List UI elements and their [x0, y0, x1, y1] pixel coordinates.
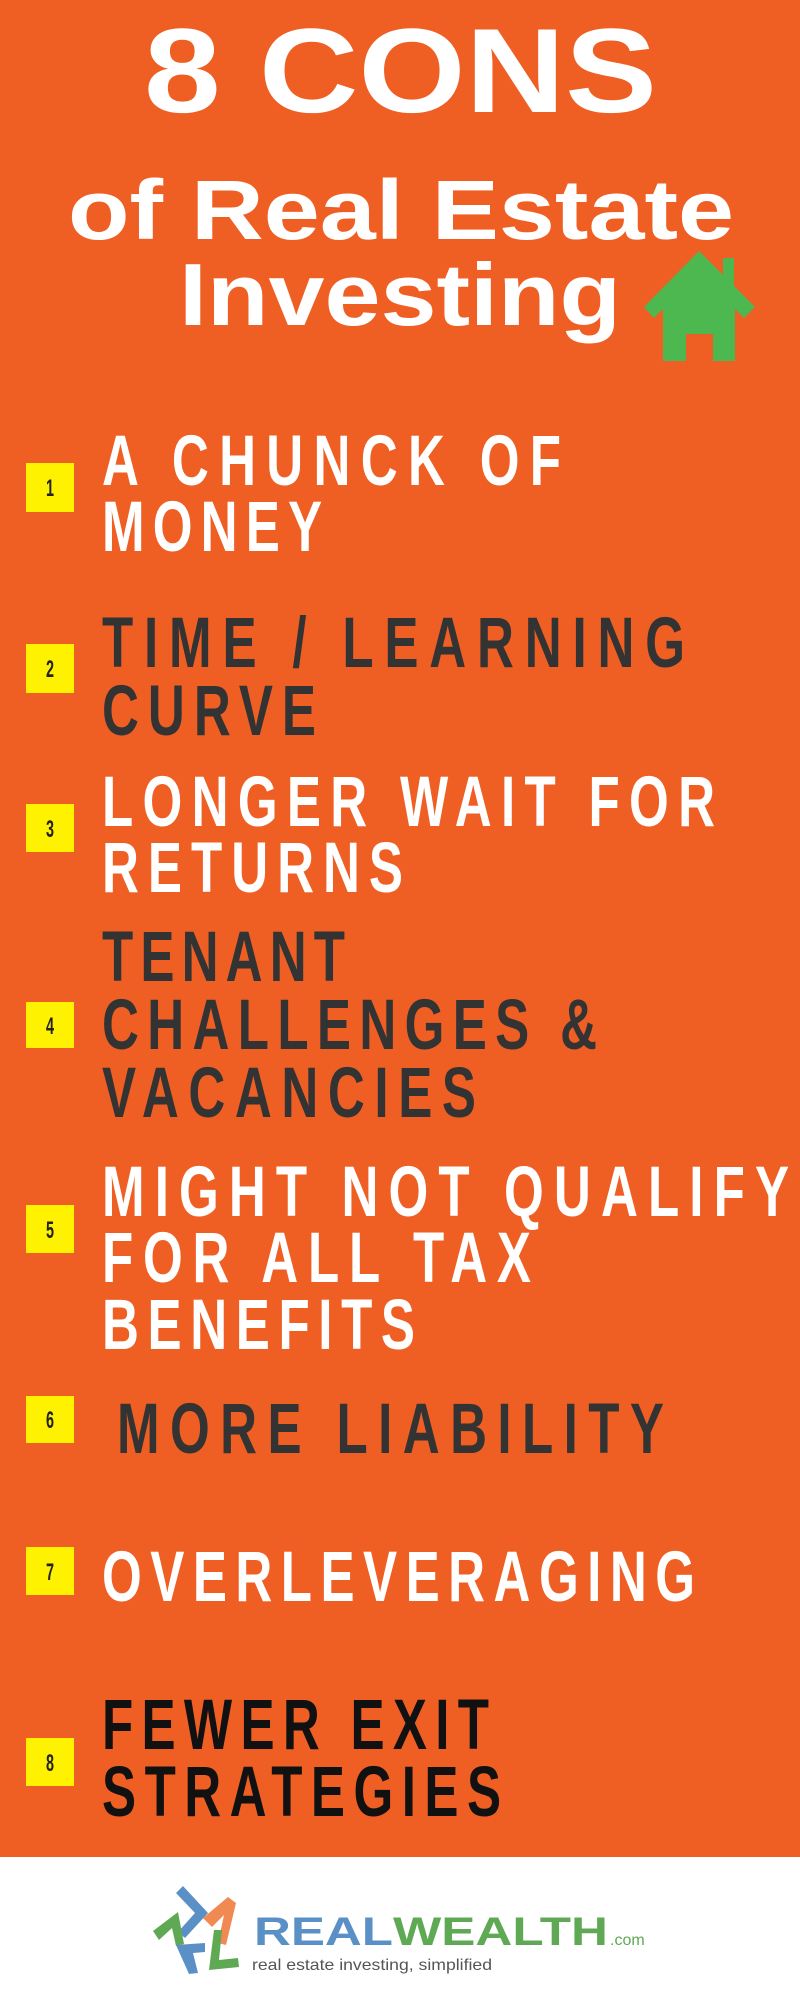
logo	[153, 1886, 645, 1974]
item 1: 1	[46, 475, 54, 502]
title: Investing	[179, 245, 621, 344]
item 4: TENANT	[102, 918, 345, 997]
item 5: FOR ALL TAX	[102, 1219, 531, 1298]
title: of Real Estate	[68, 163, 734, 257]
item 4	[26, 918, 597, 1133]
item 5: MIGHT NOT QUALIFY	[102, 1153, 789, 1232]
item 7: OVERLEVERAGING	[102, 1538, 695, 1617]
item 8: 8	[46, 1750, 54, 1777]
item 7: 7	[46, 1559, 54, 1586]
icon: logo mark	[153, 1886, 239, 1974]
item 4: 4	[46, 1013, 54, 1040]
item 5: 5	[46, 1217, 54, 1244]
item 4: VACANCIES	[102, 1054, 476, 1133]
item 6: 6	[46, 1407, 54, 1434]
item 1: A CHUNCK OF	[102, 422, 561, 501]
item 3	[26, 763, 715, 908]
item 3: RETURNS	[102, 829, 403, 908]
logo: WEALTH	[393, 1910, 608, 1954]
logo: .com	[610, 1932, 645, 1949]
item 6: MORE LIABILITY	[117, 1390, 664, 1469]
item 3: 3	[46, 816, 54, 843]
item 2	[26, 604, 685, 751]
item 8: FEWER EXIT	[102, 1686, 489, 1765]
item 1: MONEY	[102, 488, 322, 567]
logo: REAL	[254, 1910, 393, 1954]
item 2: CURVE	[102, 672, 316, 751]
icon: house	[644, 251, 755, 361]
item 3: LONGER WAIT FOR	[102, 763, 715, 842]
item 2: 2	[46, 656, 54, 683]
title: 8 CONS	[144, 4, 657, 138]
item 5	[26, 1153, 789, 1365]
item 8: STRATEGIES	[102, 1753, 501, 1832]
item 4: CHALLENGES &	[102, 986, 597, 1065]
logo: real estate investing, simplified	[252, 1957, 492, 1974]
item 2: TIME / LEARNING	[102, 604, 685, 683]
title	[68, 4, 734, 344]
item 1	[26, 422, 561, 567]
item 8	[26, 1686, 501, 1832]
item 5: BENEFITS	[102, 1286, 415, 1365]
